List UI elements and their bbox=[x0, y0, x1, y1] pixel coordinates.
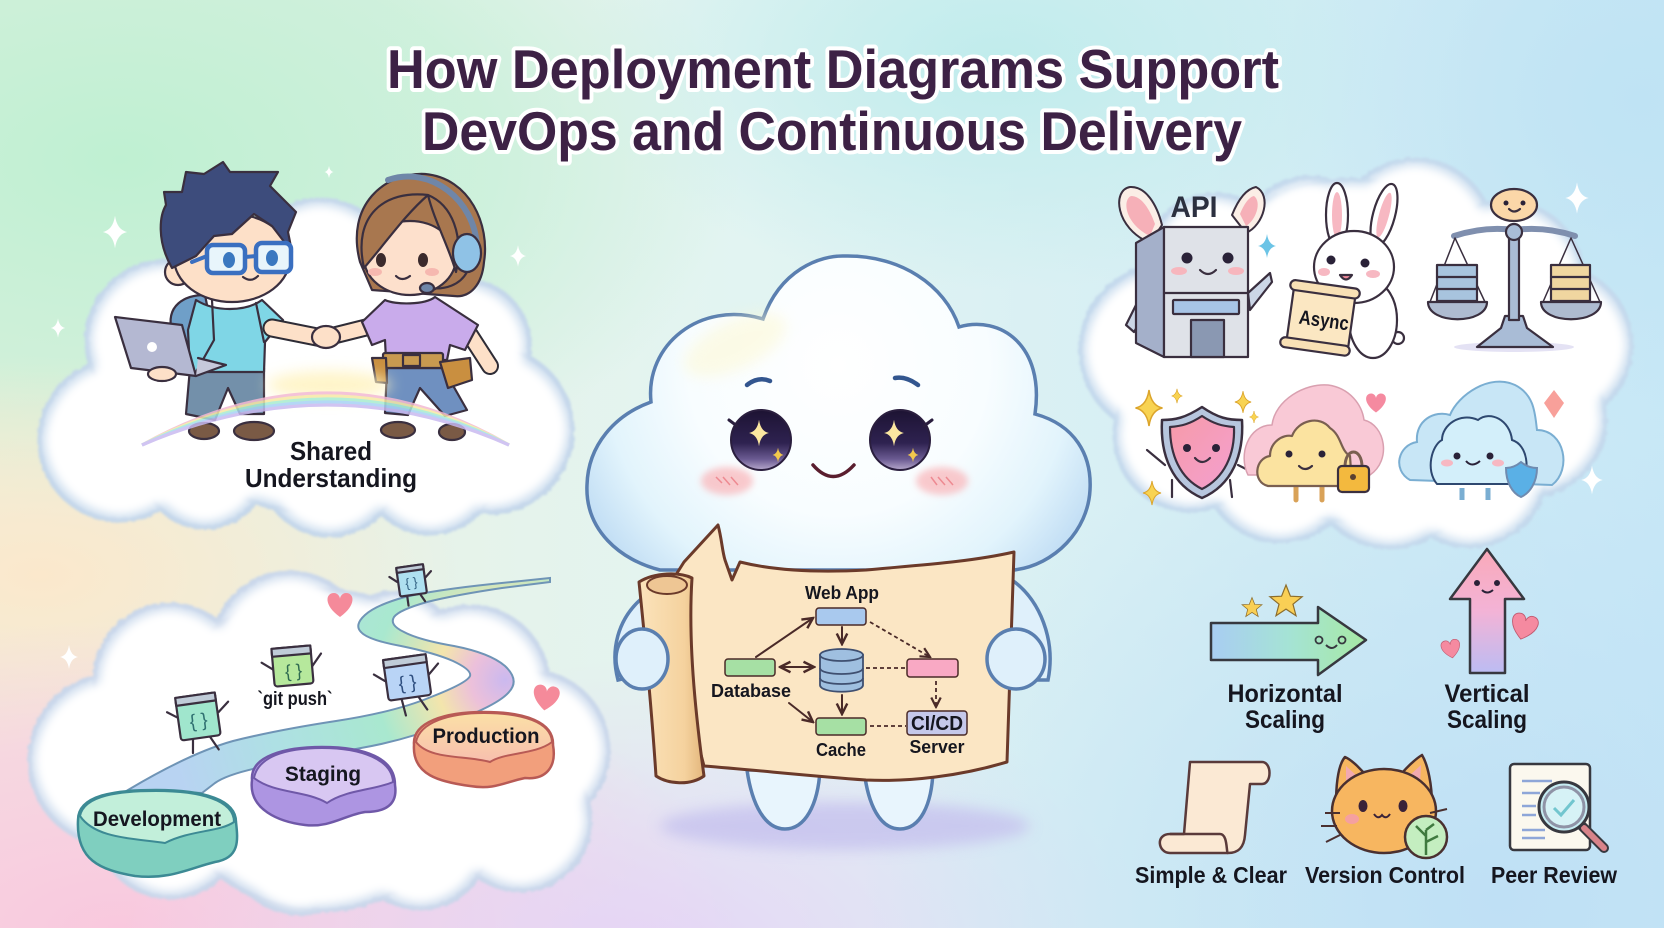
node: cache bbox=[816, 718, 866, 760]
label: git push: `git push` bbox=[258, 689, 332, 710]
stone: development: Development bbox=[93, 808, 221, 831]
code character: road top bbox=[388, 563, 435, 608]
sparkles bbox=[1565, 182, 1603, 494]
best practices bbox=[1135, 755, 1617, 888]
hearts bbox=[328, 593, 561, 712]
panel: deployment pipeline bbox=[30, 563, 608, 913]
icon: api gateway building with ears bbox=[1119, 187, 1272, 357]
ground shadow bbox=[660, 802, 1030, 850]
node: database: Database bbox=[711, 681, 791, 701]
node: ci/cd server: Server bbox=[910, 737, 964, 757]
label: shared understanding: Shared bbox=[290, 436, 372, 466]
version control: Version Control bbox=[1305, 862, 1465, 888]
arms bbox=[615, 580, 1050, 680]
icon: public cloud with shield bbox=[1399, 382, 1563, 500]
node: ci/cd server: CI/CD bbox=[911, 713, 963, 735]
diamond bbox=[1544, 390, 1564, 418]
horizontal scaling bbox=[1211, 585, 1366, 734]
node: ci/cd server bbox=[907, 711, 967, 757]
simple and clear bbox=[1135, 762, 1287, 888]
cloud background bbox=[30, 573, 608, 913]
version control bbox=[1305, 755, 1465, 888]
code character: road middle bbox=[372, 653, 445, 719]
stone: staging: Staging bbox=[285, 763, 361, 786]
node: web app: Web App bbox=[805, 583, 879, 603]
stone: production: Production bbox=[432, 725, 540, 748]
sparkles bbox=[60, 645, 78, 669]
diagram arrows bbox=[756, 618, 936, 726]
horizontal scaling: Scaling bbox=[1245, 706, 1325, 734]
panel: shared understanding bbox=[40, 162, 572, 535]
code character: road middle: { } bbox=[397, 672, 418, 695]
heart bbox=[1366, 394, 1386, 412]
peer review: Peer Review bbox=[1491, 862, 1617, 888]
code character: git push: { } bbox=[284, 660, 303, 682]
sparkles bbox=[51, 166, 526, 338]
label: api: API bbox=[1170, 191, 1218, 224]
node: web app bbox=[805, 583, 879, 625]
stone: production bbox=[414, 712, 554, 787]
node: unnamed pink bbox=[907, 659, 958, 677]
icon: load balancer scales bbox=[1428, 189, 1601, 352]
peer review bbox=[1491, 764, 1617, 888]
panel: patterns cloud bbox=[1081, 160, 1631, 547]
simple and clear: Simple & Clear bbox=[1135, 862, 1287, 888]
scroll with deployment diagram bbox=[616, 525, 1045, 783]
central cloud mascot bbox=[587, 256, 1090, 850]
scaling arrows bbox=[1211, 549, 1540, 734]
horizontal scaling: Horizontal bbox=[1228, 680, 1342, 708]
vertical scaling: Scaling bbox=[1447, 706, 1527, 734]
code character: road top: { } bbox=[404, 574, 419, 591]
stone: development bbox=[78, 790, 237, 877]
rainbow bridge bbox=[142, 371, 509, 445]
code character: bottom bbox=[165, 691, 235, 756]
character: operations engineer with headset bbox=[312, 174, 490, 440]
highlight bbox=[675, 300, 795, 390]
character: developer with laptop bbox=[115, 162, 322, 440]
icon: security shield bbox=[1147, 407, 1252, 498]
label: async: Async bbox=[1298, 307, 1350, 335]
title: DevOps and Continuous Delivery bbox=[422, 100, 1242, 162]
icon: async bunny with scroll bbox=[1280, 181, 1404, 358]
code character: git push bbox=[260, 645, 324, 688]
icon: private cloud with lock bbox=[1244, 385, 1383, 500]
icon: gold stars bbox=[1136, 389, 1258, 505]
cloud background bbox=[1081, 160, 1631, 547]
cloud body bbox=[587, 256, 1090, 570]
cloud background bbox=[40, 200, 572, 535]
sparkle: blue bbox=[1258, 234, 1276, 258]
stone: staging bbox=[252, 747, 395, 825]
rainbow pipeline road bbox=[128, 578, 550, 793]
feet bbox=[747, 770, 933, 829]
vertical scaling: Vertical bbox=[1444, 680, 1530, 708]
hands bbox=[616, 629, 1045, 689]
label: shared understanding: Understanding bbox=[245, 463, 417, 493]
code character: bottom: { } bbox=[188, 710, 209, 733]
node: cache: Cache bbox=[816, 740, 866, 760]
face bbox=[701, 378, 968, 495]
parchment sheet bbox=[660, 525, 1014, 780]
title: How Deployment Diagrams Support bbox=[387, 38, 1279, 100]
icon: database cylinder bbox=[820, 649, 863, 692]
title bbox=[387, 38, 1279, 162]
vertical scaling bbox=[1440, 549, 1540, 734]
node: database bbox=[711, 659, 791, 701]
label: shared understanding bbox=[245, 436, 417, 493]
